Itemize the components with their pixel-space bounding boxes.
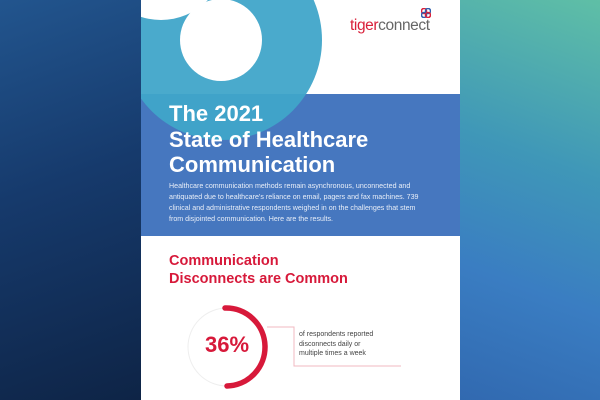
donut chart 36%: 36%: [205, 332, 249, 357]
title: The 2021: [169, 101, 263, 126]
section heading: Communication: [169, 253, 279, 269]
donut chart 36%: [188, 305, 268, 389]
decorative teal shape: [141, 0, 322, 140]
connector line: [267, 326, 401, 366]
title: Communication: [169, 152, 335, 177]
background left: [0, 0, 142, 400]
background right: [459, 0, 600, 400]
section heading: Disconnects are Common: [169, 271, 348, 287]
blue header band: [141, 94, 460, 236]
stat description: [299, 330, 373, 357]
logo: [350, 8, 431, 34]
stat description: multiple times a week: [299, 350, 366, 357]
stat description: disconnects daily or: [299, 340, 360, 348]
title: State of Healthcare: [169, 126, 368, 152]
icon: logo knot: [421, 8, 431, 18]
infographic page: [141, 0, 460, 400]
section heading: [169, 253, 348, 287]
logo: tigerconnect: [350, 17, 430, 34]
title: [169, 101, 368, 177]
stat description: of respondents reported: [299, 331, 373, 338]
intro paragraph: Healthcare communication methods remain asynchronous, unconnected and antiquated due to healthcare’s reliance on email, pagers and fax machines. 739 clinical and administrative respondents weighed in on the challenges that stem from disjointed communication. Here are the results.: [169, 182, 418, 223]
